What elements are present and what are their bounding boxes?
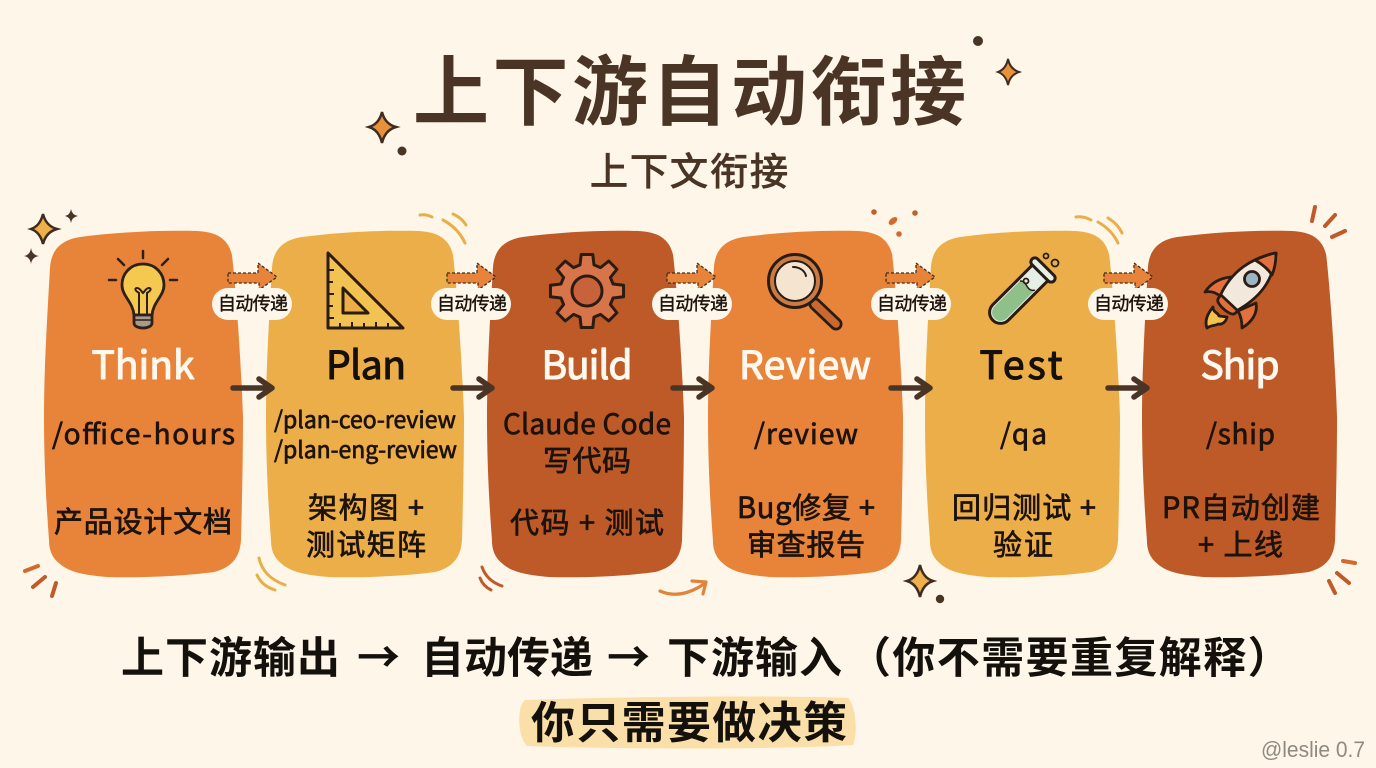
flow summary: → [607,624,650,686]
accent strokes around cards [25,207,1355,596]
flow summary: → [357,624,400,686]
output [952,485,1096,564]
solid arrow 2 [453,379,492,397]
output: 代码 + 测试 [510,500,664,542]
output: + 上线 [1198,522,1283,564]
flow summary: 上下游输出 [121,624,341,686]
flow summary: （你不需要重复解释） [848,624,1292,686]
sparkle below Test [907,565,944,603]
highlighted conclusion: 你只需要做决策 [531,687,847,751]
dashed arrow 2 [447,263,496,290]
output: 验证 [993,522,1053,564]
pill label 3: 自动传递 [658,290,728,316]
icon: rocket [1205,253,1276,328]
sparkles top-left [24,209,78,264]
sparkles around title [369,36,1019,156]
output [306,485,426,564]
step name: Ship: Ship [1200,335,1280,391]
solid arrow 5 [1108,379,1147,397]
dashed arrow 5 [1104,263,1153,290]
step name: Build: Build [542,335,632,391]
panel: Test [925,231,1120,577]
icon: set square [328,253,403,328]
command: 写代码 [543,438,631,480]
output: 产品设计文档 [54,499,232,541]
confetti dots above Review [871,209,918,237]
subtitle: 上下文衔接 [590,141,788,196]
icon: test tube [982,254,1058,331]
output: PR自动创建 [1162,485,1320,527]
watermark: @leslie 0.7 [1261,737,1365,762]
step name: Review: Review [739,335,871,391]
title: 上下游自动衔接 [413,31,966,141]
panel: Ship [1142,231,1337,577]
solid arrow 1 [233,379,272,397]
dashed arrow 1 [228,263,277,290]
solid arrow 3 [673,379,712,397]
pill label 5: 自动传递 [1094,290,1164,316]
command: Claude Code [503,403,671,443]
panel: Think [44,231,243,577]
output: 回归测试 + [952,485,1096,527]
icon: light bulb [109,251,177,328]
output [737,485,875,564]
step name: Test: Test [980,335,1063,391]
pill label 4: 自动传递 [877,290,947,316]
commands: /plan-ceo-review [274,401,456,435]
dashed arrow 4 [886,263,935,290]
command: /qa [1000,413,1047,453]
output: 审查报告 [747,522,865,564]
flow summary: 自动传递 [421,624,593,686]
command: /office-hours [52,413,235,453]
command [503,403,671,480]
output: 测试矩阵 [306,522,426,564]
icon: gear [550,254,624,328]
step name: Think: Think [92,335,195,391]
command: /review [754,413,858,453]
step name: Plan: Plan [326,335,406,391]
dashed arrow 3 [667,263,716,290]
panel: Review [708,231,903,577]
command: /ship [1206,413,1275,453]
commands [274,401,457,465]
panel: Plan [266,231,464,577]
icon: magnifying glass [768,254,836,324]
panel: Build [487,231,684,577]
flow summary: 下游输入 [667,624,843,686]
solid arrow 4 [891,379,930,397]
output [1162,485,1320,564]
output: 架构图 + [308,485,424,527]
pill label 1: 自动传递 [218,290,288,316]
pill label 2: 自动传递 [437,290,507,316]
output: Bug修复 + [737,485,875,527]
commands: /plan-eng-review [274,431,457,465]
